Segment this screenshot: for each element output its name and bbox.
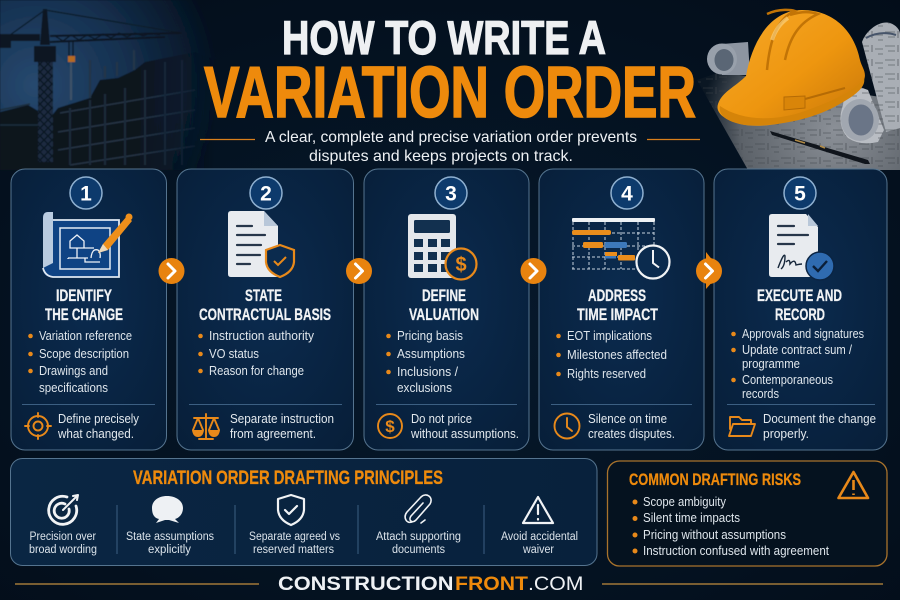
principle 3 text [249,531,340,556]
risks list: Scope ambiguity [643,495,727,509]
step 4 bullets: Milestones affected [567,348,667,362]
principle 5 text [501,531,578,556]
step 1 bullets: Scope description [39,347,129,361]
panel: common drafting risks [608,461,887,566]
step 4 tip: Silence on time [588,412,667,426]
principle 4 text: documents [392,544,445,556]
subtitle: disputes and keeps projects on track. [309,148,573,165]
icon: target [25,413,51,439]
principle 4 text [376,531,461,556]
icon: blueprint and pencil [43,212,132,277]
step 3 heading: VALUATION [409,306,479,324]
icon: dollar coin [378,414,402,438]
step 3 heading: DEFINE [422,287,466,305]
step 5 heading: RECORD [775,306,825,324]
risks list: Instruction confused with agreement [643,544,829,558]
step 1 bullets: Drawings and [39,364,108,378]
icon: paperclip [405,495,431,523]
step 2 bullets [198,329,315,378]
principle 1 text: Precision over [30,531,96,543]
step 2 tip: from agreement. [230,427,316,441]
step 1 tip: what changed. [57,427,134,441]
footer brand [15,574,883,595]
panel: step 4 address time impact [539,169,704,450]
footer brand: .COM [528,574,584,595]
principle 1 text: broad wording [29,544,97,556]
step 2 bullets: Instruction authority [209,329,315,343]
blueprints and hard hat photo [697,10,900,170]
step 5 bullets: Contemporaneous [742,373,833,387]
icon: calculator with dollar: $ [455,254,467,276]
title: HOW TO WRITE A [282,11,606,64]
step 5 tip [763,412,876,441]
step 4 tip: creates disputes. [588,427,675,441]
step 2 tip [230,412,334,441]
principle 1 text [29,531,97,556]
step 3 tip [410,412,519,441]
risks list: Pricing without assumptions [643,528,786,542]
risks background [608,461,887,566]
step 4 tip [588,412,675,441]
step 5 bullets [731,327,864,401]
principles background [10,458,597,566]
step 2 heading: CONTRACTUAL BASIS [199,306,331,324]
step 1 tip [57,412,140,441]
step 3 bullets: Inclusions / [397,365,459,379]
step 3 tip: Do not price [411,412,472,426]
footer brand: FRONT [455,574,528,595]
icon: shield check [278,495,304,525]
title [204,11,696,133]
step 5 heading [757,287,842,324]
principle 5 text: waiver [522,544,554,556]
step number 5: 5 [794,182,806,206]
step 2 bullets: VO status [209,347,259,361]
principle 2 text [126,531,214,556]
step 3 tip: without assumptions. [410,427,519,441]
step 4 bullets: EOT implications [567,329,652,343]
risks heading: COMMON DRAFTING RISKS [629,470,801,489]
principle 4 text: Attach supporting [376,531,461,543]
card background 5 [714,169,887,450]
step 3 bullets: Pricing basis [397,329,463,343]
panel: step 1 identify the change [11,169,166,450]
title: VARIATION ORDER [204,53,696,133]
step 5 tip: properly. [763,427,809,441]
principle 2 text: State assumptions [126,531,214,543]
step 1 heading: IDENTIFY [56,287,112,305]
step 2 tip: Separate instruction [230,412,334,426]
step 2 heading: STATE [245,287,282,305]
step 1 tip: Define precisely [58,412,140,426]
subtitle [200,129,700,165]
footer brand: CONSTRUCTION [278,574,454,595]
panel: step 3 define valuation [364,169,529,450]
icon: dollar coin: $ [385,417,395,436]
step number 2 [250,177,282,209]
step 3 bullets: exclusions [397,381,452,395]
icon: signed document with check [769,214,834,280]
step number 4 [611,177,643,209]
icon: calculator with dollar [408,214,476,280]
arrow: step 3 to 4 [520,258,546,284]
panel: step 5 execute and record [714,169,887,450]
card background 3 [364,169,529,450]
panel: drafting principles [10,458,597,566]
principle 3 text: Separate agreed vs [249,531,340,543]
risks list: Silent time impacts [643,511,740,525]
subtitle: A clear, complete and precise variation order prevents [265,129,637,146]
step number 1: 1 [80,182,92,206]
principle 5 text: Avoid accidental [501,531,578,543]
card background 1 [11,169,166,450]
icon: gantt chart with clock [572,218,670,278]
step 5 bullets: Approvals and signatures [742,327,864,341]
icon: speech bubble [152,496,183,523]
arrow: step 1 to 2 [158,258,184,284]
step 4 bullets: Rights reserved [567,367,646,381]
principle 3 text: reserved matters [253,544,334,556]
icon: target with arrow [49,495,78,524]
step 4 heading: ADDRESS [588,287,646,305]
icon: orange warning triangle [838,472,868,498]
icon: warning triangle [523,497,553,523]
step number 5 [784,177,816,209]
step 1 bullets: Variation reference [39,329,132,343]
construction site photo [0,0,200,170]
step 1 heading: THE CHANGE [45,306,123,324]
step 5 heading: EXECUTE AND [757,287,842,305]
step 5 bullets: records [742,387,779,401]
panel: step 2 state contractual basis [177,169,354,450]
principle 2 text: explicitly [148,544,191,556]
step number 1 [70,177,102,209]
principles heading: VARIATION ORDER DRAFTING PRINCIPLES [133,467,443,489]
step 2 heading [199,287,331,324]
step 1 bullets [28,329,132,395]
step number 3: 3 [445,182,457,206]
step 3 heading [409,287,479,324]
step 5 bullets: programme [742,357,800,371]
step 5 bullets: Update contract sum / [742,343,852,357]
icon: document with shield [228,211,294,277]
step number 4: 4 [621,182,633,206]
step 3 bullets [386,329,465,395]
step 1 heading [45,287,123,324]
step 1 bullets: specifications [39,381,108,395]
arrow: step 4 to 5 [696,252,722,289]
risks list [632,495,829,558]
card background 2 [177,169,354,450]
card background 4 [539,169,704,450]
step 4 heading [577,287,658,324]
step number 2: 2 [260,182,272,206]
icon: folder [729,417,755,436]
arrow: step 2 to 3 [346,258,372,284]
step 3 bullets: Assumptions [397,347,465,361]
icon: scales [192,414,220,439]
step 4 bullets [556,329,667,381]
step 5 tip: Document the change [763,412,876,426]
step number 3 [435,177,467,209]
step 2 bullets: Reason for change [209,364,304,378]
step 4 heading: TIME IMPACT [577,306,658,324]
icon: clock [554,414,580,438]
